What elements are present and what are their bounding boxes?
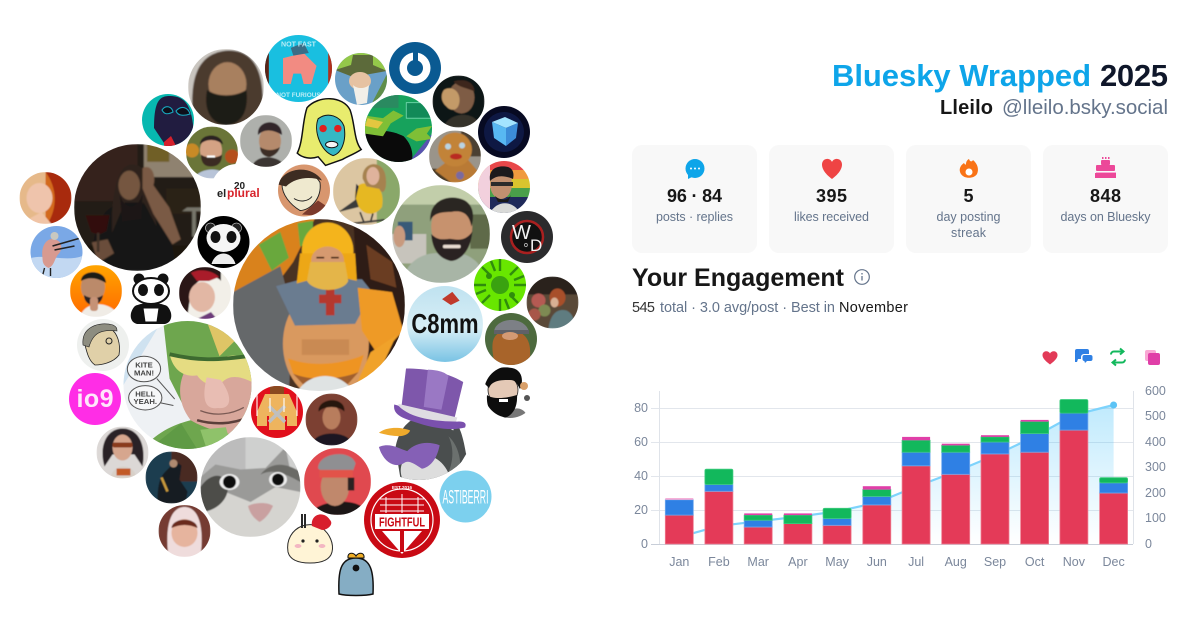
- heading: Your Engagement: Your Engagement: [632, 264, 845, 292]
- icon: birthday cake: [1095, 157, 1116, 178]
- avatar: green virus: [474, 259, 526, 311]
- avatar: smiling bearded man with autumn leaves: [185, 126, 239, 178]
- avatar: World of Darkness logo: o: [524, 242, 528, 249]
- icon: speech bubble: [686, 159, 704, 179]
- avatar: Kite Man comic panel: [123, 321, 251, 449]
- avatar: elplural 20 años logo: el: [217, 188, 226, 200]
- avatar: black and white panda sticker: [131, 274, 171, 324]
- avatar: red-haired woman: [20, 172, 72, 224]
- avatar: line-art older man: [77, 319, 129, 371]
- avatar: Kite Man comic panel: KITE: [135, 361, 153, 370]
- avatar: World of Darkness logo: W: [512, 222, 531, 244]
- month labels: [669, 555, 1125, 569]
- avatar: cartoon Darth Vader: [142, 94, 194, 146]
- month labels: Jan: [669, 555, 689, 569]
- right axis labels: 0: [1145, 537, 1152, 551]
- avatar: child in bunny hood: [158, 505, 210, 557]
- avatar bubble cluster: [20, 35, 578, 595]
- stat card: day posting streak: day posting: [936, 210, 1001, 224]
- avatar: long-haired man with beer glass: [74, 144, 201, 271]
- icon: reposts legend: [1111, 348, 1125, 366]
- right axis labels: 500: [1145, 409, 1166, 423]
- stat card: day posting streak: streak: [951, 226, 987, 240]
- avatar: elplural 20 años logo: 20: [234, 181, 246, 192]
- month labels: Aug: [945, 555, 967, 569]
- avatar: cute panda on black: [198, 216, 250, 268]
- avatar: Fightful MMA wrestling boxing logo: [364, 482, 440, 558]
- avatar: cream character with red bow: [288, 514, 333, 563]
- stat card: posts and replies: [632, 145, 757, 253]
- month labels: Dec: [1102, 555, 1125, 569]
- avatar: cartoon wizard: [335, 53, 387, 105]
- engagement summary: total · 3.0 avg/post · Best in: [660, 300, 835, 316]
- avatar: blue bird with yellow bow: [339, 553, 373, 596]
- avatar: man in beanie: [240, 115, 292, 167]
- avatar: elplural 20 años logo: [211, 164, 263, 216]
- avatar: penguin in purple top hat: [378, 368, 466, 480]
- title: Bluesky Wrapped: [832, 58, 1091, 93]
- avatar: He-Man action figure: [233, 219, 405, 400]
- left axis labels: 80: [634, 401, 648, 415]
- stat card: likes received: 395: [816, 186, 847, 206]
- avatar: C8mm winter logo: C8mm: [411, 308, 479, 339]
- avatar: World of Darkness logo: D: [530, 236, 542, 255]
- left axis labels: 20: [634, 503, 648, 517]
- left axis labels: [634, 401, 648, 551]
- avatar: man on orange gradient: [70, 265, 122, 317]
- stat card: likes received: likes received: [794, 210, 869, 224]
- avatar: long hair and beard selfie: [188, 49, 264, 125]
- month labels: Mar: [747, 555, 769, 569]
- stat card: likes received: [769, 145, 894, 253]
- avatar: Kite Man comic panel: HELL: [135, 390, 156, 399]
- stat card: days on Bluesky: days on Bluesky: [1060, 210, 1151, 224]
- avatar: green goblin hands: [365, 95, 432, 162]
- engagement summary: 545: [632, 300, 655, 316]
- stat card: posts and replies: posts · replies: [656, 210, 733, 224]
- right axis labels: 400: [1145, 435, 1166, 449]
- month labels: Sep: [984, 555, 1006, 569]
- avatar: io9 logo: io9: [76, 385, 114, 413]
- chart: monthly engagement stacked bars with cumulative line: [634, 384, 1166, 569]
- avatar: Fightful MMA wrestling boxing logo: FIGHTFUL: [379, 516, 425, 530]
- left axis labels: 60: [634, 435, 648, 449]
- avatar: smiling bearded man outdoors: [392, 185, 490, 283]
- avatar: dark comic figure: [146, 452, 198, 504]
- stat card: day posting streak: 5: [963, 186, 974, 206]
- avatar: Astiberri logo: [440, 470, 492, 522]
- avatar: cartoon viking dwarf: [485, 313, 537, 365]
- month labels: Apr: [788, 555, 808, 569]
- avatar: woman in sunglasses with curly hair: [96, 426, 148, 478]
- avatar: blonde zombie comic face: [297, 99, 361, 165]
- user name and handle: Lleilo: [940, 97, 993, 119]
- stat card: day posting streak: [906, 145, 1031, 253]
- month labels: Jul: [908, 555, 924, 569]
- right axis labels: 300: [1145, 460, 1166, 474]
- avatar: red and yellow pixel figure: [251, 386, 303, 438]
- avatar: glowing blue cube: [478, 106, 530, 158]
- engagement summary: [632, 300, 908, 316]
- left axis labels: 40: [634, 469, 648, 483]
- icon: replies legend: [1075, 349, 1092, 363]
- avatar: cartoon man on tan: [278, 164, 330, 216]
- icon: likes legend: [1042, 351, 1058, 364]
- month labels: Jun: [867, 555, 887, 569]
- avatar: man with curly hair on dusk background: [306, 394, 358, 446]
- icon: flame: [960, 159, 978, 178]
- month labels: May: [825, 555, 850, 569]
- month labels: Feb: [708, 555, 730, 569]
- stat card: posts and replies: 96 · 84: [667, 186, 722, 206]
- stat card: days on Bluesky: [1043, 145, 1168, 253]
- avatar: man with glasses on pride flag: [478, 161, 530, 213]
- avatar: shrimp with rifle on sky: [30, 226, 82, 278]
- icon: heart: [822, 159, 842, 179]
- avatar: "Not Fast Not Furious" sloth: NOT FURIOUS: [276, 92, 321, 99]
- avatar: io9 logo: [69, 373, 121, 425]
- avatar: World of Darkness logo: [501, 211, 553, 263]
- left axis labels: 0: [641, 537, 648, 551]
- speech bubble: Kite Man: [127, 356, 175, 410]
- month labels: Oct: [1025, 555, 1045, 569]
- avatar: blue ring logo: [389, 42, 441, 94]
- avatar: Pre-Raphaelite painting: [526, 276, 578, 328]
- avatar: "Not Fast Not Furious" sloth: [265, 35, 332, 102]
- engagement summary: November: [839, 300, 908, 316]
- cumulative line: [679, 402, 1117, 537]
- avatar: Kite Man comic panel: MAN!: [134, 368, 154, 377]
- right axis labels: 200: [1145, 486, 1166, 500]
- area under cumulative line: [679, 405, 1114, 544]
- avatar: older man with red headband: [304, 448, 371, 515]
- avatar: woman with dark and red hair: [179, 267, 231, 319]
- avatar: bearded cartoon portrait: [485, 367, 530, 418]
- avatar: bird with Taylor Swift head: [333, 158, 400, 225]
- stat card: days on Bluesky: 848: [1090, 186, 1121, 206]
- avatar: gingerbread man: [429, 130, 481, 182]
- user name and handle: @lleilo.bsky.social: [1002, 96, 1168, 119]
- right axis labels: [1145, 384, 1166, 551]
- avatar: Fightful MMA wrestling boxing logo: EST 2016: [392, 485, 413, 490]
- month labels: Nov: [1063, 555, 1086, 569]
- icon: quotes legend: [1145, 350, 1160, 365]
- horizontal grid lines and axes: [651, 391, 1134, 544]
- avatar bubble cluster: ASTIBERRI: [442, 488, 488, 508]
- chart legend icons: [1042, 348, 1160, 366]
- avatar: "Not Fast Not Furious" sloth: NOT FAST: [281, 41, 317, 49]
- stacked bars: [665, 400, 1128, 544]
- icon: info: [855, 270, 869, 284]
- title: 2025: [1100, 58, 1168, 93]
- avatar: C8mm winter logo: [407, 286, 483, 362]
- right axis labels: 600: [1145, 384, 1166, 398]
- avatar: man with fungal face: [432, 76, 484, 128]
- avatar: wide-eyed cat: [200, 437, 300, 537]
- right axis labels: 100: [1145, 511, 1166, 525]
- avatar: elplural 20 años logo: plural: [227, 186, 260, 200]
- avatar: Kite Man comic panel: YEAH.: [134, 397, 157, 406]
